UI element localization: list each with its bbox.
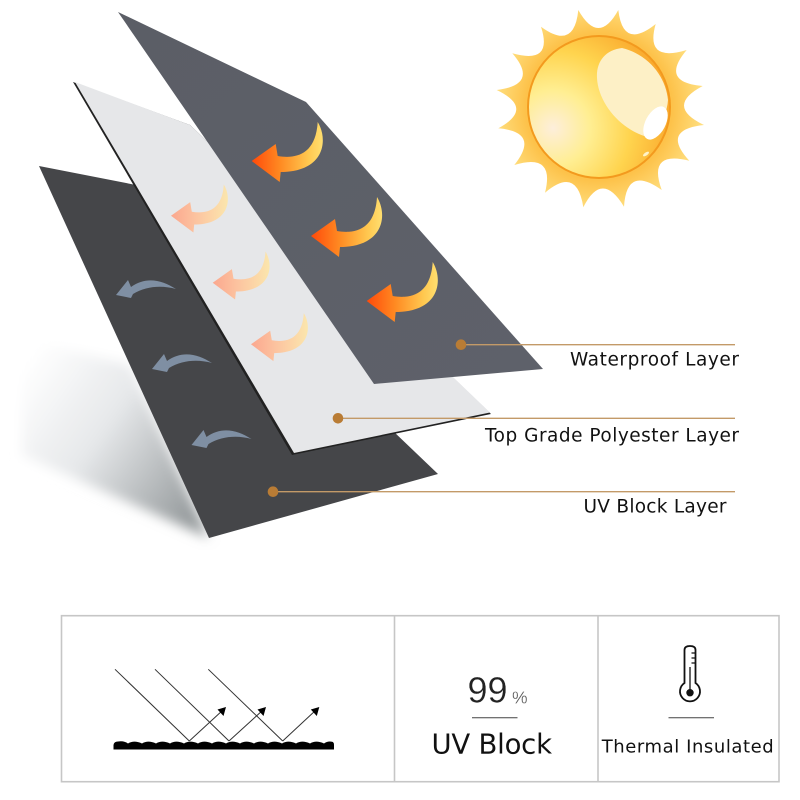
arrow: blue 2 [152,354,212,372]
drop shadow [22,338,209,538]
panel: UV block layer [39,166,438,538]
callout: waterproof layer [456,339,739,371]
callout: UV block layer [268,486,735,518]
callout: polyester layer: Top Grade Polyester Layer [484,426,739,447]
stat: 99% UV block: UV Block [432,728,552,760]
arrow: hot 1 [252,122,323,182]
arrow: blue 1 [116,280,176,298]
icon: thermometer [680,646,700,701]
sun icon [497,10,704,207]
stat: thermal insulated: Thermal Insulated [601,737,774,758]
arrow: hot 3 [367,262,438,322]
arrow: warm 3 [251,313,308,361]
icon: reflection diagram [114,669,334,750]
arrow: warm 1 [171,184,228,232]
stat: 99% UV block [432,670,552,760]
callout: waterproof layer: Waterproof Layer [570,350,739,371]
stat: 99% UV block: % [512,688,528,708]
feature table [62,616,779,782]
callout: UV block layer: UV Block Layer [584,497,727,518]
stat: thermal insulated [601,646,774,758]
arrow: hot 2 [311,197,382,257]
arrow: blue 3 [192,430,252,448]
panel: waterproof layer [118,12,543,384]
panel: polyester layer [73,82,491,455]
stat: 99% UV block: 99 [468,670,508,711]
arrow: warm 2 [213,252,270,300]
callout: polyester layer [333,413,739,447]
